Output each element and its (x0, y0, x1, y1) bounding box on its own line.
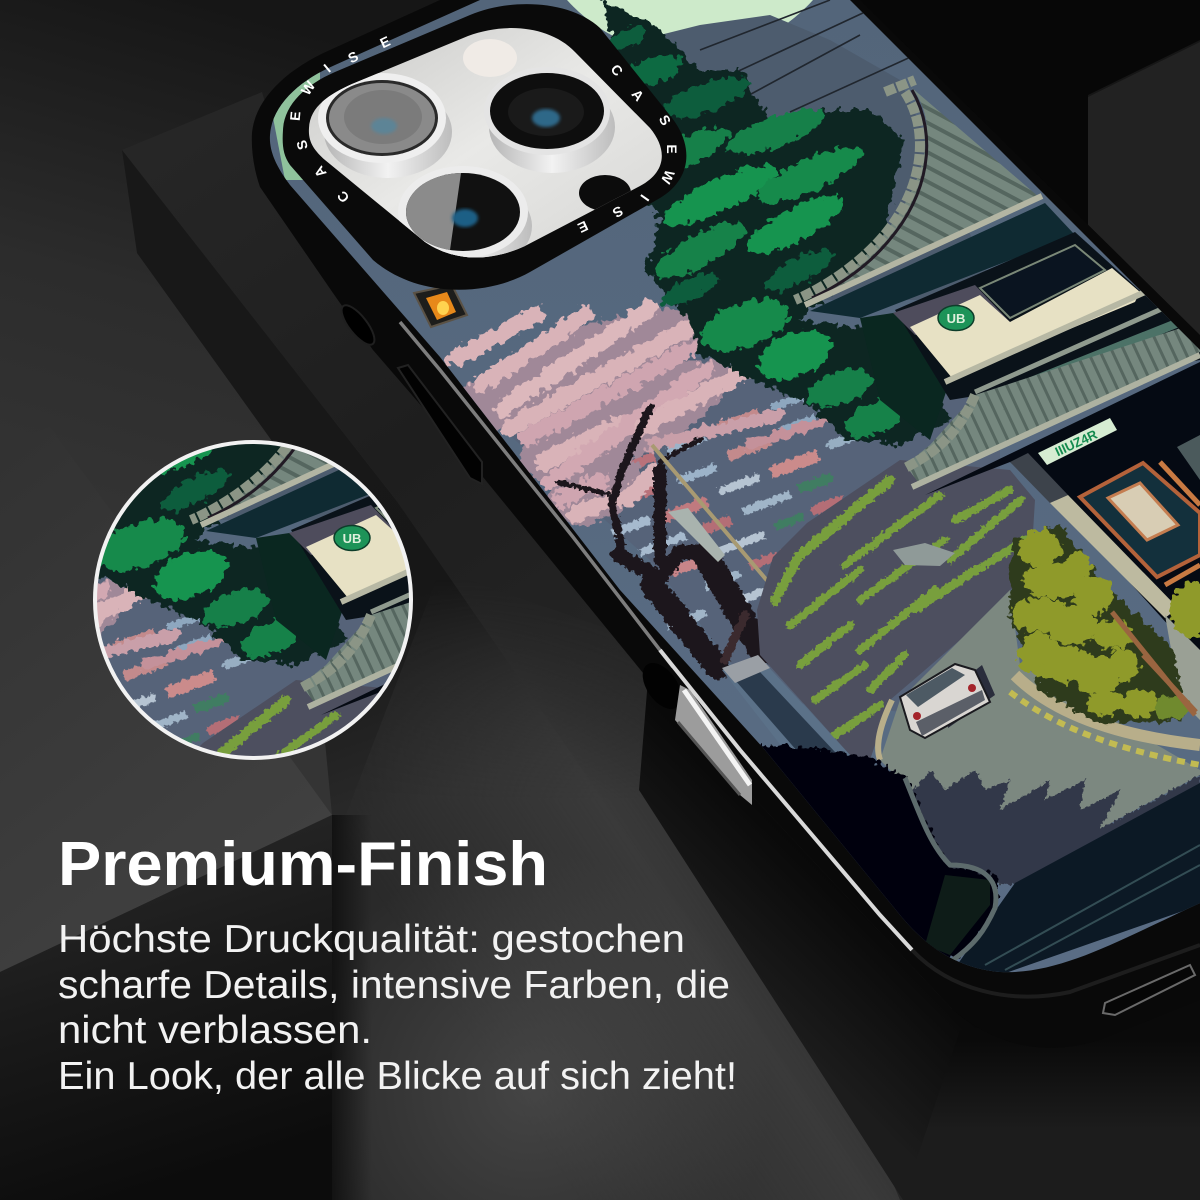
body text: Höchste Druckqualität: gestochen (58, 918, 685, 961)
casewise lettering: E (575, 218, 591, 236)
dark round bush (760, 745, 997, 960)
power lines (700, 0, 915, 112)
balcony rails (945, 292, 1190, 398)
body text: Ein Look, der alle Blicke auf sich zieht! (58, 1055, 737, 1098)
dark floor beside the phone (639, 679, 1200, 1200)
dark green bush corner (925, 875, 990, 955)
casewise lettering: S (656, 112, 674, 128)
green shop sign: IIIUZ4R (1053, 426, 1100, 459)
distant hills (640, 15, 1000, 300)
left kerb (878, 700, 892, 760)
phone case body (252, 0, 1200, 1048)
utility pole (650, 444, 767, 582)
heading: Premium-Finish (58, 830, 548, 899)
cherry blossom canopy base (435, 285, 745, 538)
side slot: lower hole (635, 656, 689, 716)
casewise lettering: A (629, 86, 647, 104)
casewise lettering: W (298, 77, 319, 98)
flash (463, 39, 517, 77)
rim: soft lower bezel (912, 945, 1200, 997)
street lines (985, 845, 1200, 970)
casewise lettering: E (377, 33, 393, 51)
casewise lettering: I (637, 192, 653, 204)
body text (58, 918, 737, 1098)
dark floor beneath the phone (903, 1000, 1200, 1200)
shop door frame (1080, 463, 1200, 577)
green shop sign (1038, 418, 1117, 465)
terrace stripes (775, 480, 1025, 735)
right base (1165, 615, 1200, 720)
hillside small sign (893, 543, 955, 566)
block: large plinth side face (122, 150, 880, 1200)
road (880, 590, 1200, 885)
side button: volume (398, 365, 482, 484)
shop poster (1108, 483, 1178, 540)
block: upper right (1088, 42, 1200, 340)
sky and town backdrop (260, 0, 1200, 975)
dark fir tree mass (600, 0, 950, 445)
microphone hole (579, 175, 631, 211)
casewise lettering: E (664, 144, 680, 154)
lower roof end tiles (905, 395, 975, 468)
upper roof (812, 88, 1040, 298)
tree behind eaves (860, 312, 950, 440)
roof ridge dark line (812, 90, 927, 298)
magnified detail circle (0, 0, 610, 1195)
mid ground town (473, 400, 950, 711)
cream wall (910, 268, 1140, 378)
casewise lettering: C (334, 188, 352, 206)
text block (58, 830, 737, 1098)
floor glow (290, 850, 770, 1200)
lower roof beam (912, 355, 1200, 487)
fir tree foliage clusters (606, 21, 911, 444)
lens three (398, 166, 532, 272)
pale green moon (567, 0, 813, 36)
yellow shrub leaves (1012, 530, 1200, 720)
hillside with green terraces (757, 460, 1035, 760)
side slot: top hole (336, 301, 380, 349)
casewise lettering: S (610, 203, 626, 221)
body text: nicht verblassen. (58, 1009, 372, 1052)
casewise lettering: I (320, 61, 334, 75)
shaded wall (893, 285, 1010, 335)
casewise lettering: C (608, 61, 626, 79)
dark upper floor (895, 232, 1200, 400)
printed pixel-art scene on the case (260, 0, 1200, 975)
light band across the plinth (418, 651, 900, 1200)
green round sign (938, 306, 974, 330)
dark foreground strip (950, 783, 1200, 975)
stone gate (722, 655, 850, 770)
camera plate glass (309, 28, 662, 258)
casewise lettering: E (287, 111, 303, 121)
block: lower left front face (0, 815, 332, 1200)
shop front dark (925, 362, 1200, 660)
stone pillar lower (1050, 495, 1178, 618)
roof beam (805, 196, 1042, 305)
camera island (283, 4, 686, 290)
shop lower orange bar (1165, 565, 1200, 585)
traffic light (414, 285, 467, 327)
shop right orange bar (1160, 462, 1200, 505)
rim highlight: glossy left edge (400, 322, 673, 667)
bush kerb (905, 778, 996, 962)
casewise lettering (287, 33, 680, 236)
roof ridge tiles (795, 80, 920, 300)
lower roof (905, 325, 1200, 482)
rim highlight: bright lower edge (660, 650, 912, 950)
tree shadow on road (905, 770, 1200, 885)
cherry blossom strands (455, 308, 870, 515)
street lamp sign (668, 508, 725, 562)
bottom port (1103, 965, 1195, 1015)
shadow right of lower block (332, 815, 372, 1200)
stone pillar top (1010, 453, 1068, 503)
blossom tree trunk (558, 408, 762, 668)
casewise lettering: S (293, 138, 311, 152)
lens two (484, 67, 615, 173)
camera plate contents (318, 39, 631, 272)
town: coloured rooftops (589, 380, 896, 637)
shop right window (1177, 435, 1200, 480)
green glow strip beside camera (274, 72, 320, 180)
body text: scharfe Details, intensive Farben, die (58, 964, 730, 1007)
side button: silver (675, 685, 752, 805)
block: lower left top face (0, 427, 332, 972)
casewise lettering: W (658, 168, 678, 187)
shrub dark base (1010, 525, 1185, 725)
circle white border (95, 442, 411, 758)
dark recess top right (560, 0, 1200, 1000)
lens one (318, 73, 452, 178)
casewise lettering: S (345, 48, 361, 66)
yellow curb dashes (1010, 692, 1200, 765)
curb (1015, 675, 1200, 745)
teal eaves band (810, 203, 1075, 318)
white car (900, 664, 995, 738)
upper window (980, 245, 1105, 318)
green round sign: UB (947, 311, 965, 326)
foreground of scene (760, 745, 1200, 975)
casewise lettering: A (311, 163, 329, 181)
wooden posts (1112, 612, 1196, 715)
